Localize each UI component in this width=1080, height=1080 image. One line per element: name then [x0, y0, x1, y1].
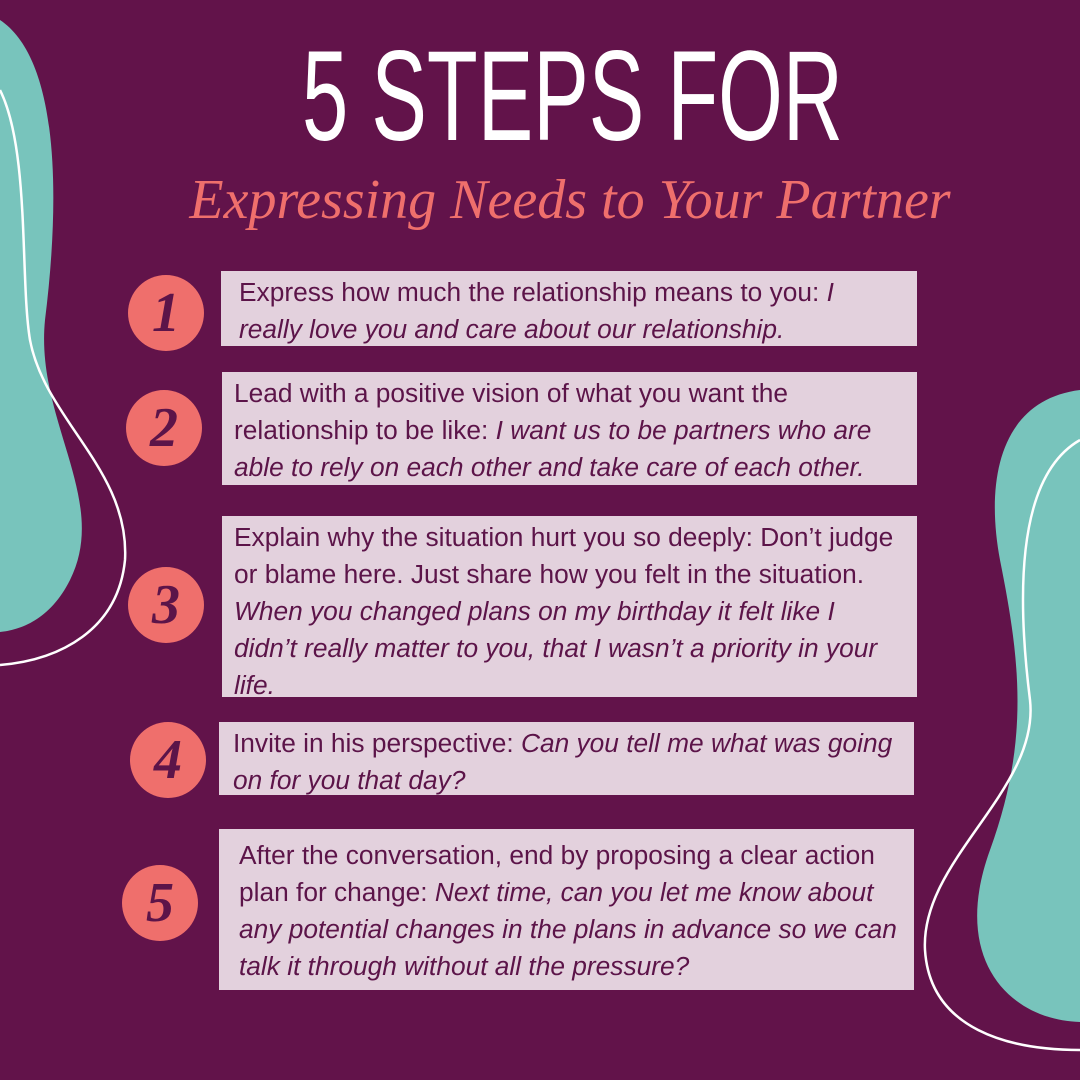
icon: number 3	[128, 567, 204, 643]
step 4	[130, 722, 914, 798]
icon: number 5	[122, 865, 198, 941]
icon: number 1: 1	[152, 282, 180, 344]
icon: number 4	[130, 722, 206, 798]
text 2: Lead with a positive vision of what you want the relationship to be like: I want us to be partners who are able to rely on each other and take care of each other.	[234, 378, 871, 482]
subtitle: Expressing Needs to Your Partner	[189, 169, 951, 231]
icon: number 3: 3	[152, 574, 180, 636]
icon: number 2: 2	[150, 397, 178, 459]
step 1	[128, 271, 917, 351]
icon: number 5: 5	[146, 872, 174, 934]
text 5: After the conversation, end by proposing a clear action plan for change: Next time, can you let me know about any potential changes in the plans in advance so we can talk it through without all the pressure?	[239, 840, 897, 981]
step 3	[128, 516, 917, 700]
step 2	[126, 372, 917, 485]
text 4: Invite in his perspective: Can you tell me what was going on for you that day?	[233, 728, 892, 795]
title: 5 STEPS FOR	[302, 25, 843, 168]
text 3: Explain why the situation hurt you so deeply: Don’t judge or blame here. Just share how you felt in the situation. When you changed plans on my birthday it felt like I didn’t really matter to you, that I wasn’t a priority in your life.	[234, 522, 893, 700]
text 1: Express how much the relationship means to you: I really love you and care about our relationship.	[239, 277, 834, 344]
icon: number 2	[126, 390, 202, 466]
step 5	[122, 829, 914, 990]
icon: number 1	[128, 275, 204, 351]
icon: number 4: 4	[154, 729, 182, 791]
